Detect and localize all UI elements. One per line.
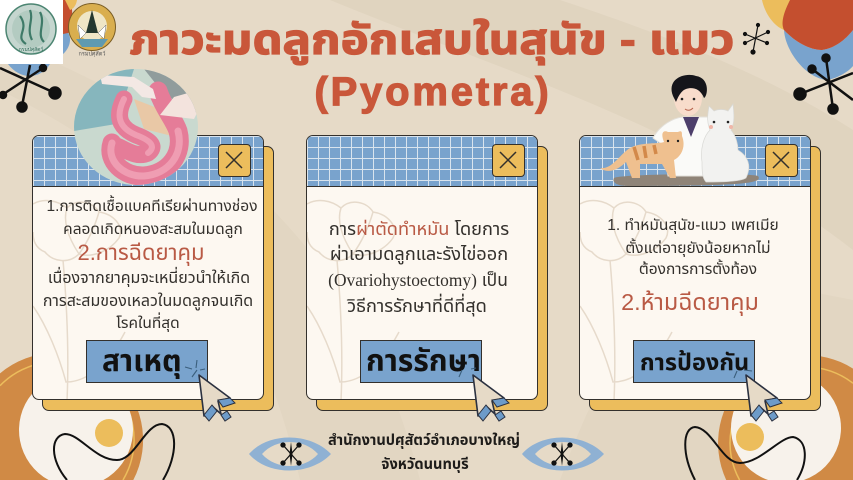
prevention text: ต้องการการตั้งท้อง	[639, 261, 757, 278]
causes text: 2.การฉีดยาคุม	[77, 240, 205, 265]
logo: provincial seal on white panel: กรมปศุสัตว์	[19, 46, 43, 53]
panel header grid	[580, 136, 810, 187]
logo: department seal	[68, 3, 116, 57]
causes text: เนื่องจากยาคุมจะเหนี่ยวนำให้เกิด	[48, 270, 250, 287]
button: causes	[86, 340, 208, 383]
icon: left eye	[249, 438, 331, 470]
button: causes: สาเหตุ	[102, 345, 182, 378]
cursor: causes	[184, 360, 236, 422]
button: treatment: การรักษา	[366, 345, 481, 378]
prevention text	[607, 217, 779, 316]
cursor: treatment	[458, 368, 510, 422]
panel header grid	[33, 136, 263, 187]
icon: right eye	[522, 438, 604, 470]
close button icon	[765, 144, 798, 177]
prevention text: 1. ทำหมันสุนัข-แมว เพศเมีย	[607, 217, 779, 234]
button: prevention	[633, 340, 755, 383]
causes text	[43, 195, 258, 332]
footer office name	[328, 432, 520, 473]
illustration: vet with cat and dog	[600, 74, 759, 186]
causes text: การสะสมของเหลวในมดลูกจนเกิด	[43, 293, 253, 310]
prevention text: 2.ห้ามฉีดยาคุม	[621, 289, 759, 315]
footer office name: จังหวัดนนทบุรี	[381, 457, 469, 473]
panel header grid	[307, 136, 537, 187]
title	[130, 16, 734, 114]
causes text: โรคในที่สุด	[116, 315, 180, 332]
causes text: คลอดเกิดหนองสะสมในมดลูก	[63, 221, 243, 238]
icon: small asterisk	[742, 22, 770, 55]
panel: prevention	[579, 135, 821, 411]
footer office name: สำนักงานปศุสัตว์อำเภอบางใหญ่	[328, 433, 520, 449]
treatment text: วิธีการรักษาที่ดีที่สุด	[347, 296, 487, 316]
panel: treatment	[306, 135, 548, 411]
title: (Pyometra)	[315, 70, 551, 114]
panel: causes	[32, 135, 274, 411]
treatment text: ผ่าเอามดลูกและรังไข่ออก	[330, 244, 508, 264]
treatment text: (Ovariohystoectomy) เป็น	[328, 270, 508, 290]
title: ภาวะมดลูกอักเสบในสุนัข - แมว	[130, 16, 734, 63]
cursor: prevention	[734, 370, 783, 422]
causes text: 1.การติดเชื้อแบคทีเรียผ่านทางช่อง	[46, 198, 258, 215]
prevention text: ตั้งแต่อายุยังน้อยหากไม่	[625, 240, 771, 257]
logo: provincial seal on white panel	[0, 0, 63, 64]
close button icon	[218, 144, 251, 177]
treatment text: การผ่าตัดทำหมัน โดยการ	[329, 219, 509, 239]
treatment text	[328, 219, 509, 316]
button: prevention: การป้องกัน	[640, 349, 749, 375]
photo: infected uterus	[74, 69, 198, 185]
close button icon	[492, 144, 525, 177]
